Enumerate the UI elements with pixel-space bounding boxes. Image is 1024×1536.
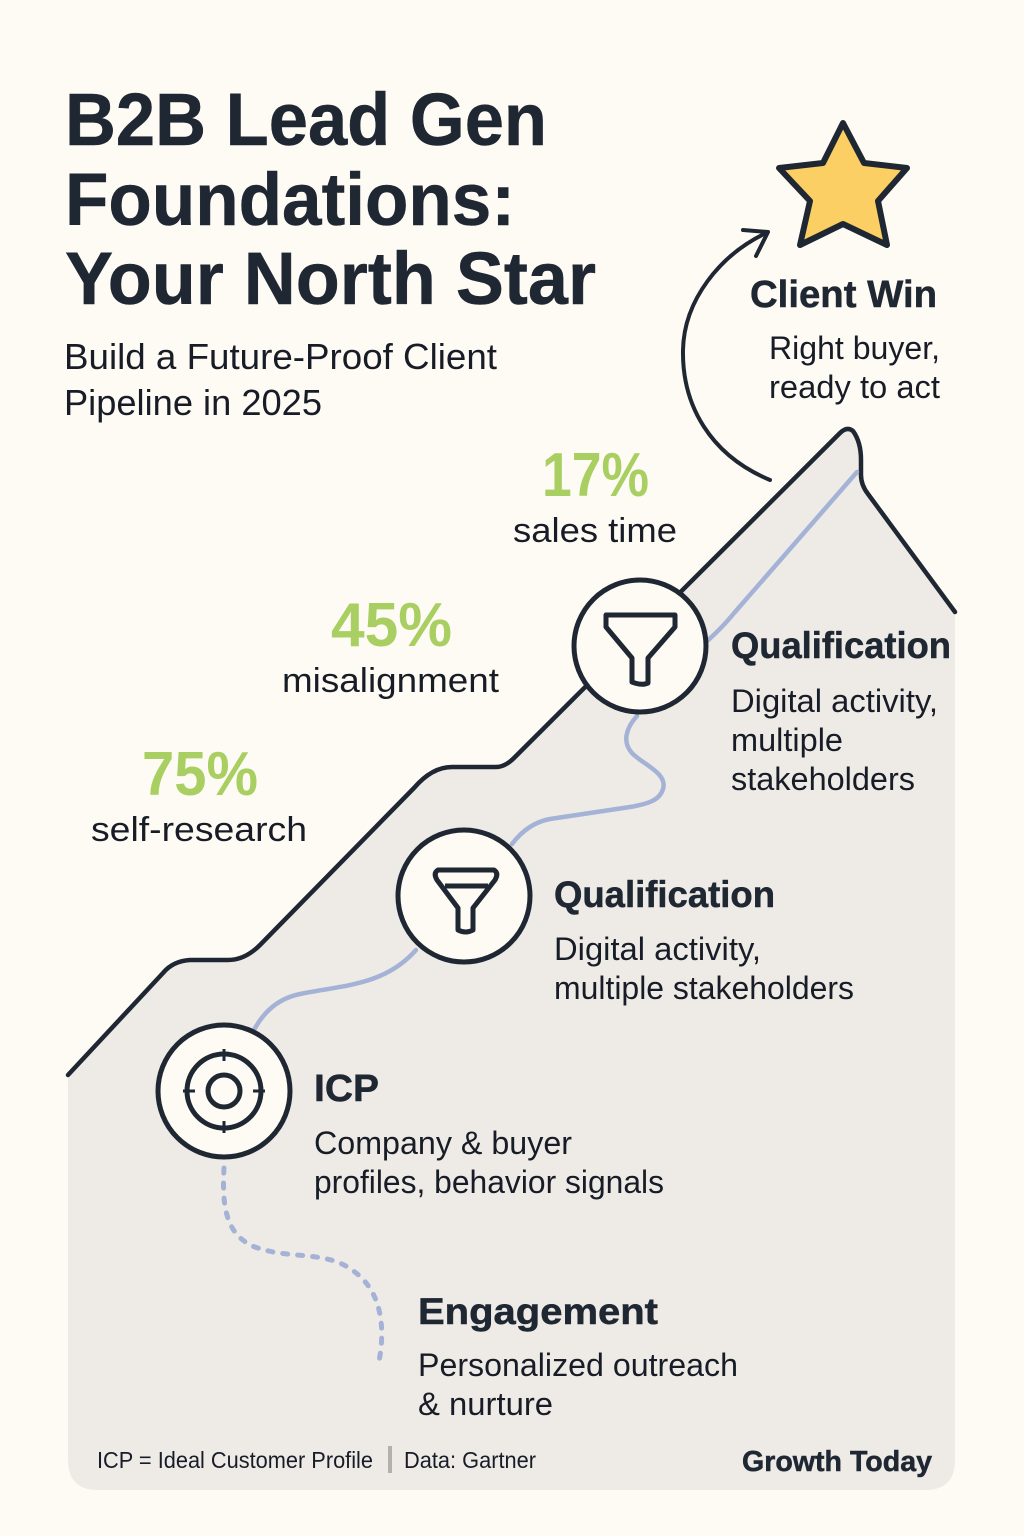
upper qualification step: Digital activity, xyxy=(731,683,938,719)
engagement step xyxy=(418,1291,738,1422)
title xyxy=(65,78,596,320)
client win label: ready to act xyxy=(769,369,940,405)
icon: upper funnel xyxy=(574,580,706,712)
upper qualification step: multiple xyxy=(731,722,843,758)
lower qualification step: multiple stakeholders xyxy=(554,970,854,1006)
upper qualification step xyxy=(731,625,951,797)
stat: 75% self-research xyxy=(91,740,307,849)
stat: 75% self-research: 75% xyxy=(142,740,258,809)
footer note: Data: Gartner xyxy=(404,1447,536,1473)
mountain panel xyxy=(68,429,955,1490)
footer note: ICP = Ideal Customer Profile xyxy=(97,1447,373,1473)
arrow to client win xyxy=(683,230,770,480)
stat: 17% sales time: sales time xyxy=(513,512,677,550)
lower qualification step: Digital activity, xyxy=(554,931,761,967)
ICP step: Company & buyer xyxy=(314,1125,572,1161)
engagement step: & nurture xyxy=(418,1386,553,1422)
footer note xyxy=(97,1446,536,1473)
ICP step: profiles, behavior signals xyxy=(314,1164,664,1200)
icon: target xyxy=(158,1025,290,1157)
icon: lower funnel xyxy=(398,830,530,962)
ICP step: ICP xyxy=(314,1068,379,1110)
winding path xyxy=(224,472,857,1366)
engagement step: Engagement xyxy=(418,1291,658,1332)
client win label: Right buyer, xyxy=(769,330,940,366)
title: B2B Lead Gen xyxy=(65,78,547,161)
stat: 75% self-research: self-research xyxy=(91,811,307,849)
title: Your North Star xyxy=(65,237,596,320)
engagement step: Personalized outreach xyxy=(418,1347,738,1383)
stat: 45% misalignment: misalignment xyxy=(282,662,500,700)
client win label xyxy=(750,274,940,405)
stat: 45% misalignment: 45% xyxy=(331,591,452,660)
lower qualification step xyxy=(554,874,854,1006)
stat: 45% misalignment xyxy=(282,591,500,700)
client win label: Client Win xyxy=(750,274,937,316)
title: Foundations: xyxy=(65,158,515,241)
upper qualification step: stakeholders xyxy=(731,761,915,797)
upper qualification step: Qualification xyxy=(731,625,951,666)
stat: 17% sales time xyxy=(513,441,677,550)
ICP step xyxy=(314,1068,664,1200)
subtitle xyxy=(64,336,497,423)
stat: 17% sales time: 17% xyxy=(542,441,649,510)
subtitle: Build a Future-Proof Client xyxy=(64,336,497,377)
subtitle: Pipeline in 2025 xyxy=(64,382,322,423)
lower qualification step: Qualification xyxy=(554,874,775,915)
icon: star xyxy=(779,123,907,245)
brand: Growth Today xyxy=(742,1446,932,1478)
